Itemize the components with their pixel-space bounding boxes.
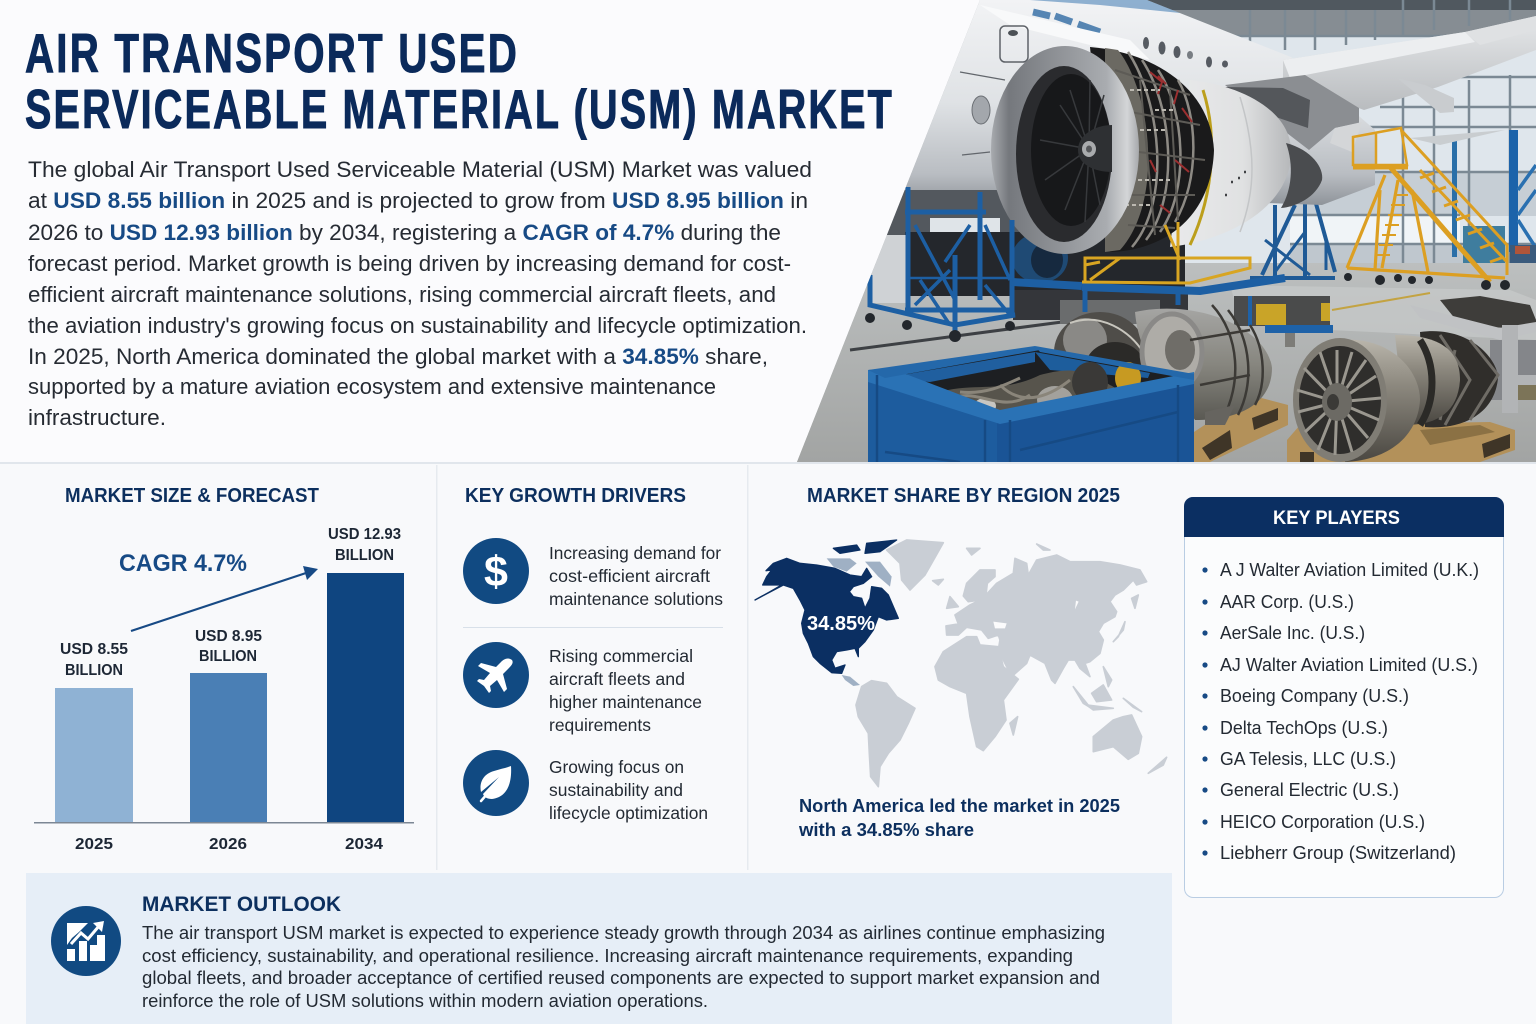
panel: market share by region [755, 485, 1167, 840]
key players list: Liebherr Group (Switzerland) [1220, 842, 1456, 863]
right blue steel structure [1452, 130, 1536, 271]
outlook text: cost efficiency, sustainability, and operational resilience. Increasing aircraft maintenance requirements, expanding [142, 945, 1073, 966]
bar 2034 [327, 573, 404, 822]
hangar windows and walls [1140, 0, 1536, 268]
heading: market size: MARKET SIZE & FORECAST [65, 485, 319, 507]
year labels [75, 836, 383, 853]
bar value labels: BILLION [199, 648, 257, 665]
heading: drivers: KEY GROWTH DRIVERS [465, 485, 686, 507]
horizontal section rule [0, 462, 1536, 464]
key players list: AJ Walter Aviation Limited (U.S.) [1220, 654, 1478, 675]
intro text block: The global Air Transport Used Serviceable Material (USM) Market was valued [28, 157, 812, 182]
year labels: 2026 [209, 836, 247, 853]
driver text: sustainability [549, 757, 708, 823]
aircraft fuselage [880, 0, 1375, 205]
driver text: cost: Increasing demand for [549, 543, 721, 563]
bar 2026 [190, 673, 267, 822]
driver text: sustainability: sustainability and [549, 780, 683, 800]
ladder wheels [1344, 273, 1510, 290]
yellow equipment box [1234, 296, 1333, 347]
bar value labels: USD 8.55 [60, 641, 128, 658]
intro text block: infrastructure. [28, 405, 166, 430]
driver text: fleets: Rising commercial [549, 646, 693, 666]
outlook text: The air transport USM market is expected to experience steady growth through 2034 as airlines continue emphasizing [142, 922, 1105, 943]
bar value labels [60, 526, 401, 679]
driver text: sustainability: lifecycle optimization [549, 803, 708, 823]
key players list: AAR Corp. (U.S.) [1220, 591, 1354, 612]
panel: market size and forecast [34, 485, 414, 853]
intro text block: forecast period. Market growth is being driven by increasing demand for cost- [28, 251, 791, 276]
CAGR label: CAGR 4.7% [119, 550, 247, 577]
intro text block: efficient aircraft maintenance solutions, rising commercial aircraft fleets, and [28, 282, 776, 307]
bar value labels: BILLION [335, 547, 394, 564]
key players list: Delta TechOps (U.S.) [1220, 717, 1388, 738]
stored engine modules [1054, 305, 1272, 425]
intro text block: the aviation industry's growing focus on sustainability and lifecycle optimization. [28, 313, 807, 338]
year labels: 2025 [75, 836, 113, 853]
bar value labels: BILLION [65, 662, 123, 679]
panel: key growth drivers [463, 485, 723, 823]
map value label: 34.85% [807, 613, 875, 635]
intro text block: 2026 to USD 12.93 billion by 2034, registering a CAGR of 4.7% during the [28, 220, 781, 245]
outlook text [142, 922, 1105, 1011]
bar value labels: USD 12.93 [328, 526, 401, 543]
outlook text: reinforce the role of USM solutions within modern aviation operations. [142, 990, 708, 1011]
hangar floor [797, 263, 1536, 462]
key players header: KEY PLAYERS [1273, 508, 1400, 529]
wooden pallets [1194, 395, 1515, 462]
map caption: with a 34.85% share [798, 819, 974, 840]
yellow engine cradle [1082, 222, 1250, 284]
intro text block [28, 157, 812, 430]
intro text block: In 2025, North America dominated the global market with a 34.85% share, [28, 344, 768, 369]
exposed engine core [1090, 47, 1214, 252]
key players list: GA Telesis, LLC (U.S.) [1220, 748, 1396, 769]
bar value labels: USD 8.95 [195, 628, 262, 645]
driver text: cost [549, 543, 723, 609]
icon: airplane [463, 642, 529, 708]
engine intake [991, 46, 1139, 254]
driver text: fleets [549, 646, 702, 735]
driver text: fleets: requirements [549, 715, 651, 735]
intro text block: supported by a mature aviation ecosystem and extensive maintenance [28, 374, 716, 399]
driver text: sustainability: Growing focus on [549, 757, 684, 777]
yellow access ladder [1347, 128, 1507, 282]
outlook text: global fleets, and broader acceptance of certified reused components are expected to support market expansion and [142, 967, 1100, 988]
driver text: fleets: higher maintenance [549, 692, 702, 712]
title: SERVICEABLE MATERIAL (USM) MARKET [25, 78, 894, 140]
blue work stand [870, 187, 1285, 332]
icon: dollar: $ [484, 548, 508, 596]
title: AIR TRANSPORT USED [25, 22, 519, 84]
engine nacelle and exhaust [1170, 80, 1322, 247]
background machinery [872, 190, 1188, 324]
far blue stand [1250, 200, 1335, 280]
hangar and engine photo illustration [797, 0, 1536, 462]
key players list: Boeing Company (U.S.) [1220, 685, 1409, 706]
aircraft wing [1225, 16, 1536, 152]
blue parts crate [868, 346, 1194, 462]
map caption: North America led the market in 2025 [799, 795, 1120, 816]
outlook heading: MARKET OUTLOOK [142, 892, 341, 916]
driver text: fleets: aircraft fleets and [549, 669, 685, 689]
key players header [1184, 497, 1504, 537]
driver text: cost: cost-efficient aircraft [549, 566, 710, 586]
grey engine frame [1440, 296, 1536, 413]
year labels: 2034 [345, 836, 383, 853]
driver text: cost: maintenance solutions [549, 589, 723, 609]
bar 2025 [55, 688, 133, 822]
stand wheels [865, 313, 1015, 342]
key players list [1202, 559, 1479, 863]
icon: growth chart [51, 906, 121, 976]
large turbine module [1293, 331, 1498, 462]
title [25, 22, 894, 140]
key players list: AerSale Inc. (U.S.) [1220, 622, 1365, 643]
key players list: A J Walter Aviation Limited (U.K.) [1220, 559, 1479, 580]
intro text block: at USD 8.55 billion in 2025 and is projected to grow from USD 8.95 billion in [28, 188, 808, 213]
panel: key players [1184, 497, 1504, 898]
heading: region: MARKET SHARE BY REGION 2025 [807, 485, 1120, 507]
world map [755, 540, 1167, 787]
key players list: General Electric (U.S.) [1220, 779, 1399, 800]
key players list: HEICO Corporation (U.S.) [1220, 811, 1425, 832]
icon: dollar [463, 538, 529, 604]
icon: leaf [463, 750, 529, 816]
panel: market outlook [26, 873, 1172, 1024]
arrow: growth [131, 566, 318, 631]
map caption [798, 795, 1120, 840]
